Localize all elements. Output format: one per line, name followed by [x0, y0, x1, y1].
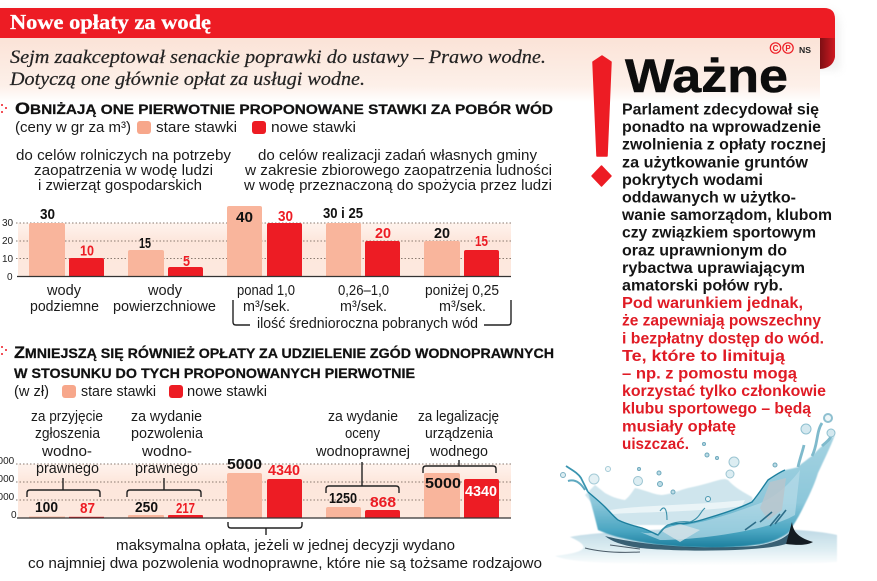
text block: important note: – np. z pomostu mogą — [622, 366, 797, 382]
text block: important note: czy związkiem sportowym — [622, 225, 816, 242]
category label: ocena: oceny — [345, 425, 380, 442]
icon: exclamation mark — [592, 56, 611, 186]
note: maximum fee: co najmniej dwa pozwolenia wodnoprawne, które nie są tożsame rodzajowo — [28, 555, 542, 572]
category label: legalizacja: urządzenia — [425, 425, 494, 442]
intro text: Dotyczą one głównie opłat za usługi wodne. — [9, 69, 365, 90]
category label: zgloszenie: wodno- — [41, 443, 92, 460]
category label: zgloszenie: zgłoszenia — [35, 425, 101, 442]
category label: ocena: wodnoprawnej — [315, 443, 410, 460]
bracket: annual water quantity: ilość średnioroczna pobranych wód — [257, 315, 478, 332]
section 1 heading: OBNIŻAJĄ ONE PIERWOTNIE PROPONOWANE STAWKI ZA POBÓR WÓD — [15, 99, 553, 118]
pale intro panel — [0, 38, 820, 102]
category label: agriculture: i zwierząt gospodarskich — [38, 177, 202, 194]
copyright marks: C — [773, 44, 779, 53]
values chart 1: 5 — [183, 253, 190, 270]
category label: pozwolenie — [127, 408, 204, 497]
text block: important note: zwolnienia z opłaty rocznej — [622, 137, 826, 154]
axis labels chart 1: powierzchniowe — [113, 298, 216, 315]
category label: legalizacja: wodnego — [429, 443, 488, 460]
legend 2: stare stawki — [81, 383, 156, 400]
text block: important note: Parlament zdecydował się — [622, 102, 819, 118]
legend 1: (ceny w gr za m³) — [15, 119, 131, 136]
bars: wody podziemne — [29, 223, 104, 276]
values chart 1: 30 — [278, 208, 293, 225]
red title band — [0, 8, 835, 38]
bars: ocena wodnoprawna — [326, 507, 400, 518]
bar chart 1: 0 — [7, 272, 13, 283]
category label: ocena: za wydanie — [328, 408, 398, 425]
values chart 2: 4340 — [268, 462, 300, 479]
category label: agriculture — [16, 147, 232, 194]
text block: important note — [621, 102, 832, 453]
text block: important note: Pod warunkiem jednak, — [622, 295, 803, 312]
values chart 2: 87 — [80, 500, 95, 517]
values chart 1: 20 — [434, 225, 450, 242]
values chart 2: 5000 — [425, 475, 461, 492]
note: maximum fee: maksymalna opłata, jeżeli w jednej decyzji wydano — [116, 537, 455, 554]
axis labels chart 1: 0,26–1,0 — [338, 282, 389, 299]
section 2 heading: ZMNIEJSZĄ SIĘ RÓWNIEŻ OPŁATY ZA UDZIELENIE ZGÓD WODNOPRAWNYCH — [14, 343, 554, 362]
legend 1 — [15, 119, 356, 136]
values chart 2: 100 — [35, 499, 58, 516]
values chart 1: 40 — [236, 209, 253, 226]
text block: important note: oraz uprawnionym do — [622, 242, 787, 259]
category label: municipal: w wodę przeznaczoną do spożycia przez ludzi — [243, 177, 552, 194]
axis labels chart 1: m³/sek. — [439, 298, 486, 315]
copyright marks: P — [785, 44, 791, 53]
text block: important note: że zapewniają powszechny — [622, 313, 821, 330]
axis labels chart 1 — [30, 282, 499, 315]
legend 1: nowe stawki — [271, 119, 356, 136]
bar chart 1: 30 — [2, 218, 14, 229]
text block: important note: korzystać tylko członkowie — [622, 383, 826, 400]
text block: important note: oddawanych w użytko- — [622, 190, 796, 206]
text block: important note: rybactwa uprawiającym — [622, 260, 805, 277]
text block: important note: Te, które to limitują — [622, 348, 786, 365]
values chart 1: 15 — [475, 233, 488, 250]
axis labels chart 1: m³/sek. — [340, 298, 387, 315]
values chart 1 — [40, 205, 488, 270]
values chart 2: 1250 — [329, 490, 357, 507]
section 2 heading: W STOSUNKU DO TYCH PROPONOWANYCH PIERWOTNIE — [14, 366, 415, 381]
category label: pozwolenie: wodno- — [141, 443, 192, 460]
legend 2: (w zł) — [14, 383, 49, 400]
axis labels chart 1: ponad 1,0 — [237, 282, 295, 299]
bar chart 1 — [2, 205, 511, 283]
copyright marks: NS — [799, 45, 811, 55]
text block: important note: wanie samorządom, klubom — [621, 207, 832, 224]
text block: important note: i bezpłatny dostęp do wód. — [622, 330, 824, 347]
bar chart 2 — [0, 456, 511, 521]
legend 1: stare stawki — [156, 119, 237, 136]
category label: ocena — [315, 408, 410, 493]
note: maximum fee — [28, 522, 542, 572]
values chart 2: 4340 — [465, 483, 497, 500]
text block: important note: ponadto na wprowadzenie — [622, 119, 821, 136]
bars: ponad 1,0 — [227, 206, 302, 276]
axis labels chart 1: wody — [147, 282, 182, 299]
bars: za wydanie pozwolenia — [128, 515, 203, 518]
section 2 heading — [1, 343, 554, 381]
category label: municipal: do celów realizacji zadań własnych gminy — [258, 147, 538, 164]
text block: important note: amatorski połów ryb. — [622, 278, 783, 294]
bars: ponizej 0,25 — [424, 241, 499, 276]
bars: maksymalna oplata — [227, 473, 302, 518]
legend 2 — [14, 383, 267, 400]
category label: zgloszenie: prawnego — [36, 460, 99, 477]
values chart 2: 868 — [370, 494, 396, 511]
category label: pozwolenie: pozwolenia — [131, 425, 204, 442]
title: Nowe opłaty za wodę — [10, 10, 211, 34]
values chart 2: 250 — [135, 499, 158, 516]
bracket: annual water quantity — [233, 300, 511, 332]
values chart 1: 30 i 25 — [323, 205, 363, 222]
header banner — [0, 8, 840, 102]
values chart 1: 10 — [80, 242, 94, 260]
bars: wody powierzchniowe — [128, 250, 203, 276]
bars: za przyjecie zgloszenia — [29, 516, 104, 518]
axis labels chart 1: wody — [46, 282, 81, 299]
axis labels chart 1: podziemne — [30, 298, 99, 315]
bars: legalizacja urzadzenia — [424, 473, 499, 518]
bar chart 2: 0 — [11, 510, 17, 521]
axis labels chart 1: poniżej 0,25 — [425, 282, 499, 299]
bars: 0,26-1,0 — [326, 223, 400, 276]
text block: important note: uiszczać. — [622, 436, 689, 453]
values chart 1: 20 — [375, 225, 391, 242]
text block: important note: za użytkowanie gruntów — [622, 154, 808, 171]
category label: zgloszenie: za przyjęcie — [31, 408, 103, 425]
heading: Ważne: Ważne — [625, 49, 788, 102]
category label: pozwolenie: prawnego — [135, 460, 198, 477]
category label: legalizacja — [418, 408, 499, 473]
category label: zgloszenie — [27, 408, 103, 497]
category label: municipal: w zakresie zbiorowego zaopatrzenia ludności — [244, 162, 552, 179]
legend 2: nowe stawki — [187, 383, 267, 400]
category label: municipal — [243, 147, 552, 194]
values chart 1: 15 — [139, 235, 151, 252]
bar chart 1: 20 — [2, 236, 14, 247]
text block: important note: musiały opłatę — [622, 418, 736, 435]
values chart 2 — [35, 456, 497, 517]
category label: pozwolenie: za wydanie — [131, 408, 202, 425]
icon: water splash — [555, 414, 837, 565]
category label: agriculture: do celów rolniczych na potrzeby — [16, 147, 232, 164]
intro text: Sejm zaakceptował senackie poprawki do ustawy – Prawo wodne. — [10, 47, 546, 68]
ribbon fold — [820, 38, 835, 69]
text block: important note: klubu sportowego – będą — [622, 401, 811, 418]
text block: important note: pokrytych wodami — [622, 172, 763, 189]
copyright marks — [770, 43, 811, 55]
values chart 2: 217 — [176, 500, 195, 517]
category label: legalizacja: za legalizację — [418, 408, 499, 425]
axis labels chart 1: m³/sek. — [243, 298, 290, 315]
bar chart 1: 10 — [2, 254, 14, 265]
intro text — [9, 47, 546, 90]
category label: agriculture: zaopatrzenia w wodę ludzi — [34, 162, 213, 179]
values chart 2: 5000 — [227, 456, 262, 473]
values chart 1: 30 — [40, 206, 55, 223]
